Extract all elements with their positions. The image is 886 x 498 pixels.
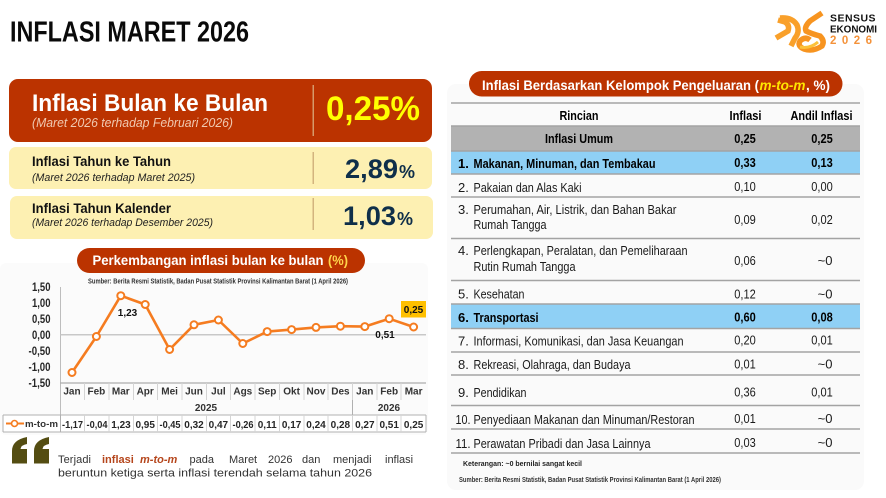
values row: 0,95 [135, 420, 155, 431]
row 11: perawatan [456, 435, 832, 451]
table header: Rincian [560, 108, 599, 123]
heading: perkembangan inflasi [77, 248, 365, 273]
logo: Sensus Ekonomi 2026 [776, 12, 877, 50]
y axis labels: 0,50 [32, 314, 50, 326]
panel: inflasi tahun kalender [10, 196, 433, 239]
month labels: Jul [211, 386, 226, 398]
row 10: penyediaan [456, 411, 832, 427]
chart source: Sumber: Berita Resmi Statistik, Badan Pusat Statistik Provinsi Kalimantan Barat (1 April 2026) [88, 278, 348, 286]
text block: quote: menjadi [333, 454, 372, 466]
legend m-to-m [6, 419, 58, 430]
panel: inflasi bulan ke bulan: (Maret 2026 terhadap Februari 2026) [32, 116, 233, 130]
text block: quote: m-to-m [140, 454, 177, 466]
month labels [63, 386, 423, 398]
row 5: kesehatan: Kesehatan [474, 286, 524, 302]
title: INFLASI MARET 2026 [10, 16, 249, 48]
row 9: pendidikan: Pendidikan [474, 385, 526, 400]
month labels: Mar [112, 386, 130, 398]
heading: kelompok pengeluaran: , %) [806, 78, 830, 93]
month labels: Mar [405, 386, 423, 398]
row 11: perawatan: 11. [456, 436, 470, 451]
y axis labels: -1,50 [28, 378, 50, 390]
month labels: Des [331, 386, 350, 398]
text block: quote: 2026 [268, 454, 292, 466]
row 8: rekreasi: ~0 [818, 356, 832, 372]
callout 0,25: 0,25 [404, 305, 424, 316]
row 4: perlengkapan: 0,06 [734, 253, 756, 268]
row 3: perumahan [458, 202, 833, 232]
panel: inflasi tahun ke tahun: 2,89 [345, 154, 398, 184]
panel: inflasi bulan ke bulan: Inflasi Bulan ke Bulan [32, 90, 268, 117]
row 5: kesehatan [458, 286, 832, 302]
row 9: pendidikan: 9. [458, 385, 469, 400]
row 7: informasi: 0,01 [811, 332, 833, 348]
row 6: transportasi [451, 304, 860, 328]
row 4: perlengkapan: Perlengkapan, Peralatan, dan Pemeliharaan [474, 243, 688, 258]
row 1: makanan: 0,33 [734, 155, 756, 170]
y axis labels [28, 282, 50, 390]
values row: 0,11 [258, 420, 277, 431]
text block: quote: Maret [229, 454, 257, 466]
row 8: rekreasi: 8. [458, 357, 469, 372]
row 10: penyediaan: ~0 [818, 411, 832, 426]
heading: kelompok pengeluaran: Inflasi Berdasarkan Kelompok Pengeluaran ( [482, 78, 759, 93]
values row: 0,51 [379, 420, 399, 431]
y axis labels: 1,50 [32, 282, 50, 294]
chart data table [3, 383, 426, 432]
text block: quote: pada [190, 454, 215, 466]
month labels: Nov [307, 386, 326, 398]
row 8: rekreasi [458, 356, 832, 372]
line chart: inflasi m-to-m [28, 282, 426, 432]
table note: Keterangan: ~0 bernilai sangat kecil [463, 459, 582, 468]
row 9: pendidikan: 0,01 [811, 384, 833, 400]
row 7: informasi: 0,20 [734, 332, 756, 348]
values row: 0,25 [404, 420, 424, 431]
row 3: perumahan: 3. [458, 202, 469, 217]
panel: inflasi tahun ke tahun: Inflasi Tahun ke Tahun [32, 153, 171, 169]
logo: Sensus Ekonomi 2026: 2026 [830, 35, 872, 47]
row 6: transportasi: 6. [458, 310, 469, 325]
row 1: makanan: 0,13 [811, 155, 833, 170]
row 10: penyediaan: 10. [456, 412, 470, 427]
panel: inflasi tahun ke tahun [9, 147, 432, 189]
row 2: pakaian: 0,10 [734, 179, 756, 194]
panel: inflasi tahun ke tahun: % [399, 162, 415, 182]
month labels: Jun [185, 386, 203, 398]
row: inflasi umum: 0,25 [811, 131, 833, 146]
month labels: Ags [233, 386, 253, 398]
values row: -0,26 [232, 420, 254, 431]
row 3: perumahan: 0,02 [811, 212, 833, 227]
row 4: perlengkapan: Rutin Rumah Tangga [474, 259, 576, 274]
row 5: kesehatan: 0,12 [734, 286, 756, 302]
panel: inflasi tahun ke tahun: (Maret 2026 terhadap Maret 2025) [32, 172, 195, 184]
row 7: informasi: Informasi, Komunikasi, dan Jasa Keuangan [474, 334, 684, 348]
values row: 0,47 [209, 420, 229, 431]
row 5: kesehatan: 5. [458, 286, 469, 302]
month labels: Jan [356, 386, 373, 398]
text block: quote: dan [302, 454, 320, 466]
row 2: pakaian: Pakaian dan Alas Kaki [474, 180, 582, 195]
table source: Sumber: Berita Resmi Statistik, Badan Pusat Statistik Provinsi Kalimantan Barat (1 April 2026) [459, 477, 721, 484]
table: inflasi per kelompok [451, 103, 860, 453]
logo: Sensus Ekonomi 2026: EKONOMI [830, 24, 877, 36]
row 4: perlengkapan: ~0 [818, 253, 832, 268]
row 10: penyediaan: Penyediaan Makanan dan Minuman/Restoran [474, 412, 694, 427]
row 2: pakaian [458, 179, 833, 195]
year label 2026: 2026 [378, 403, 401, 414]
table header: Inflasi [730, 108, 762, 123]
panel: inflasi bulan ke bulan: 0,25% [326, 90, 420, 128]
row 11: perawatan: Perawatan Pribadi dan Jasa Lainnya [474, 436, 651, 451]
data label 0,51: 0,51 [375, 330, 395, 341]
data label 1,23: 1,23 [118, 308, 138, 319]
row 6: transportasi: Transportasi [474, 310, 538, 325]
month labels: Jan [63, 386, 81, 398]
text block: quote [58, 454, 413, 480]
legend m-to-m: m-to-m [25, 419, 58, 430]
text block: quote: beruntun ketiga serta inflasi terendah selama tahun 2026 [58, 468, 372, 480]
data line with markers [68, 292, 417, 376]
row 8: rekreasi: 0,01 [734, 356, 756, 372]
panel: inflasi tahun kalender: 1,03 [343, 201, 396, 231]
row 1: makanan: 1. [458, 156, 469, 171]
panel: chart background [0, 263, 428, 435]
panel: inflasi tahun kalender: % [397, 209, 413, 229]
row: inflasi umum: Inflasi Umum [545, 131, 613, 146]
icon: quotation mark [12, 437, 49, 464]
text block: quote: Terjadi [58, 454, 91, 466]
month labels: Feb [380, 386, 398, 398]
month labels: Sep [258, 386, 276, 398]
values row: -1,17 [62, 420, 83, 431]
text block: quote: inflasi [102, 454, 134, 466]
row 8: rekreasi: Rekreasi, Olahraga, dan Budaya [474, 357, 631, 372]
row 4: perlengkapan [458, 243, 832, 274]
row 11: perawatan: ~0 [818, 435, 832, 450]
values row: 0,28 [331, 420, 351, 431]
y axis labels: 0,00 [32, 330, 50, 342]
month labels: Feb [88, 386, 105, 398]
y axis labels: -1,00 [28, 362, 50, 374]
text block: quote: inflasi [385, 454, 413, 466]
callout 0,25 [401, 301, 426, 318]
row 2: pakaian: 0,00 [811, 179, 833, 194]
values row: 0,27 [355, 420, 375, 431]
row 6: transportasi: 0,60 [734, 310, 756, 324]
row 1: makanan: Makanan, Minuman, dan Tembakau [474, 156, 656, 171]
table header [560, 108, 852, 123]
values row: 1,23 [111, 420, 131, 431]
month labels: Mei [161, 386, 178, 398]
row 2: pakaian: 2. [458, 180, 469, 195]
heading: perkembangan inflasi: (%) [328, 253, 348, 268]
row 7: informasi [458, 332, 833, 348]
heading: kelompok pengeluaran [469, 71, 842, 96]
panel: inflasi tahun kalender: Inflasi Tahun Kalender [32, 200, 172, 216]
row 9: pendidikan: 0,36 [734, 384, 756, 400]
row 10: penyediaan: 0,01 [734, 411, 756, 426]
row 6: transportasi: 0,08 [811, 310, 833, 324]
row 3: perumahan: Perumahan, Air, Listrik, dan Bahan Bakar [474, 202, 677, 217]
logo: Sensus Ekonomi 2026: SENSUS [830, 12, 876, 24]
panel: inflasi bulan ke bulan [9, 79, 432, 142]
values row: 0,17 [282, 420, 302, 431]
heading: kelompok pengeluaran: m-to-m [760, 78, 806, 93]
year label 2025: 2025 [195, 403, 218, 414]
row 1: makanan [451, 151, 860, 174]
panel: inflasi tahun kalender: (Maret 2026 terhadap Desember 2025) [32, 217, 213, 229]
month labels: Okt [283, 386, 301, 398]
values row: -0,04 [86, 420, 108, 431]
month labels: Apr [137, 386, 154, 398]
values row: 0,24 [306, 420, 326, 431]
table header: Andil Inflasi [790, 108, 852, 123]
values row: -0,45 [160, 420, 181, 431]
row 3: perumahan: Rumah Tangga [474, 217, 547, 232]
row 5: kesehatan: ~0 [818, 286, 832, 302]
y axis labels: -0,50 [28, 346, 50, 358]
heading: perkembangan inflasi: Perkembangan inflasi bulan ke bulan [92, 253, 324, 268]
row 4: perlengkapan: 4. [458, 243, 469, 258]
row: inflasi umum [451, 126, 860, 151]
row 9: pendidikan [458, 384, 833, 400]
values row [62, 420, 424, 431]
row 3: perumahan: 0,09 [734, 212, 756, 227]
row 11: perawatan: 0,03 [734, 435, 756, 450]
y axis labels: 1,00 [32, 298, 50, 310]
row 7: informasi: 7. [458, 334, 469, 348]
row: inflasi umum: 0,25 [734, 131, 756, 146]
values row: 0,32 [184, 420, 204, 431]
panel: table background [447, 84, 864, 490]
